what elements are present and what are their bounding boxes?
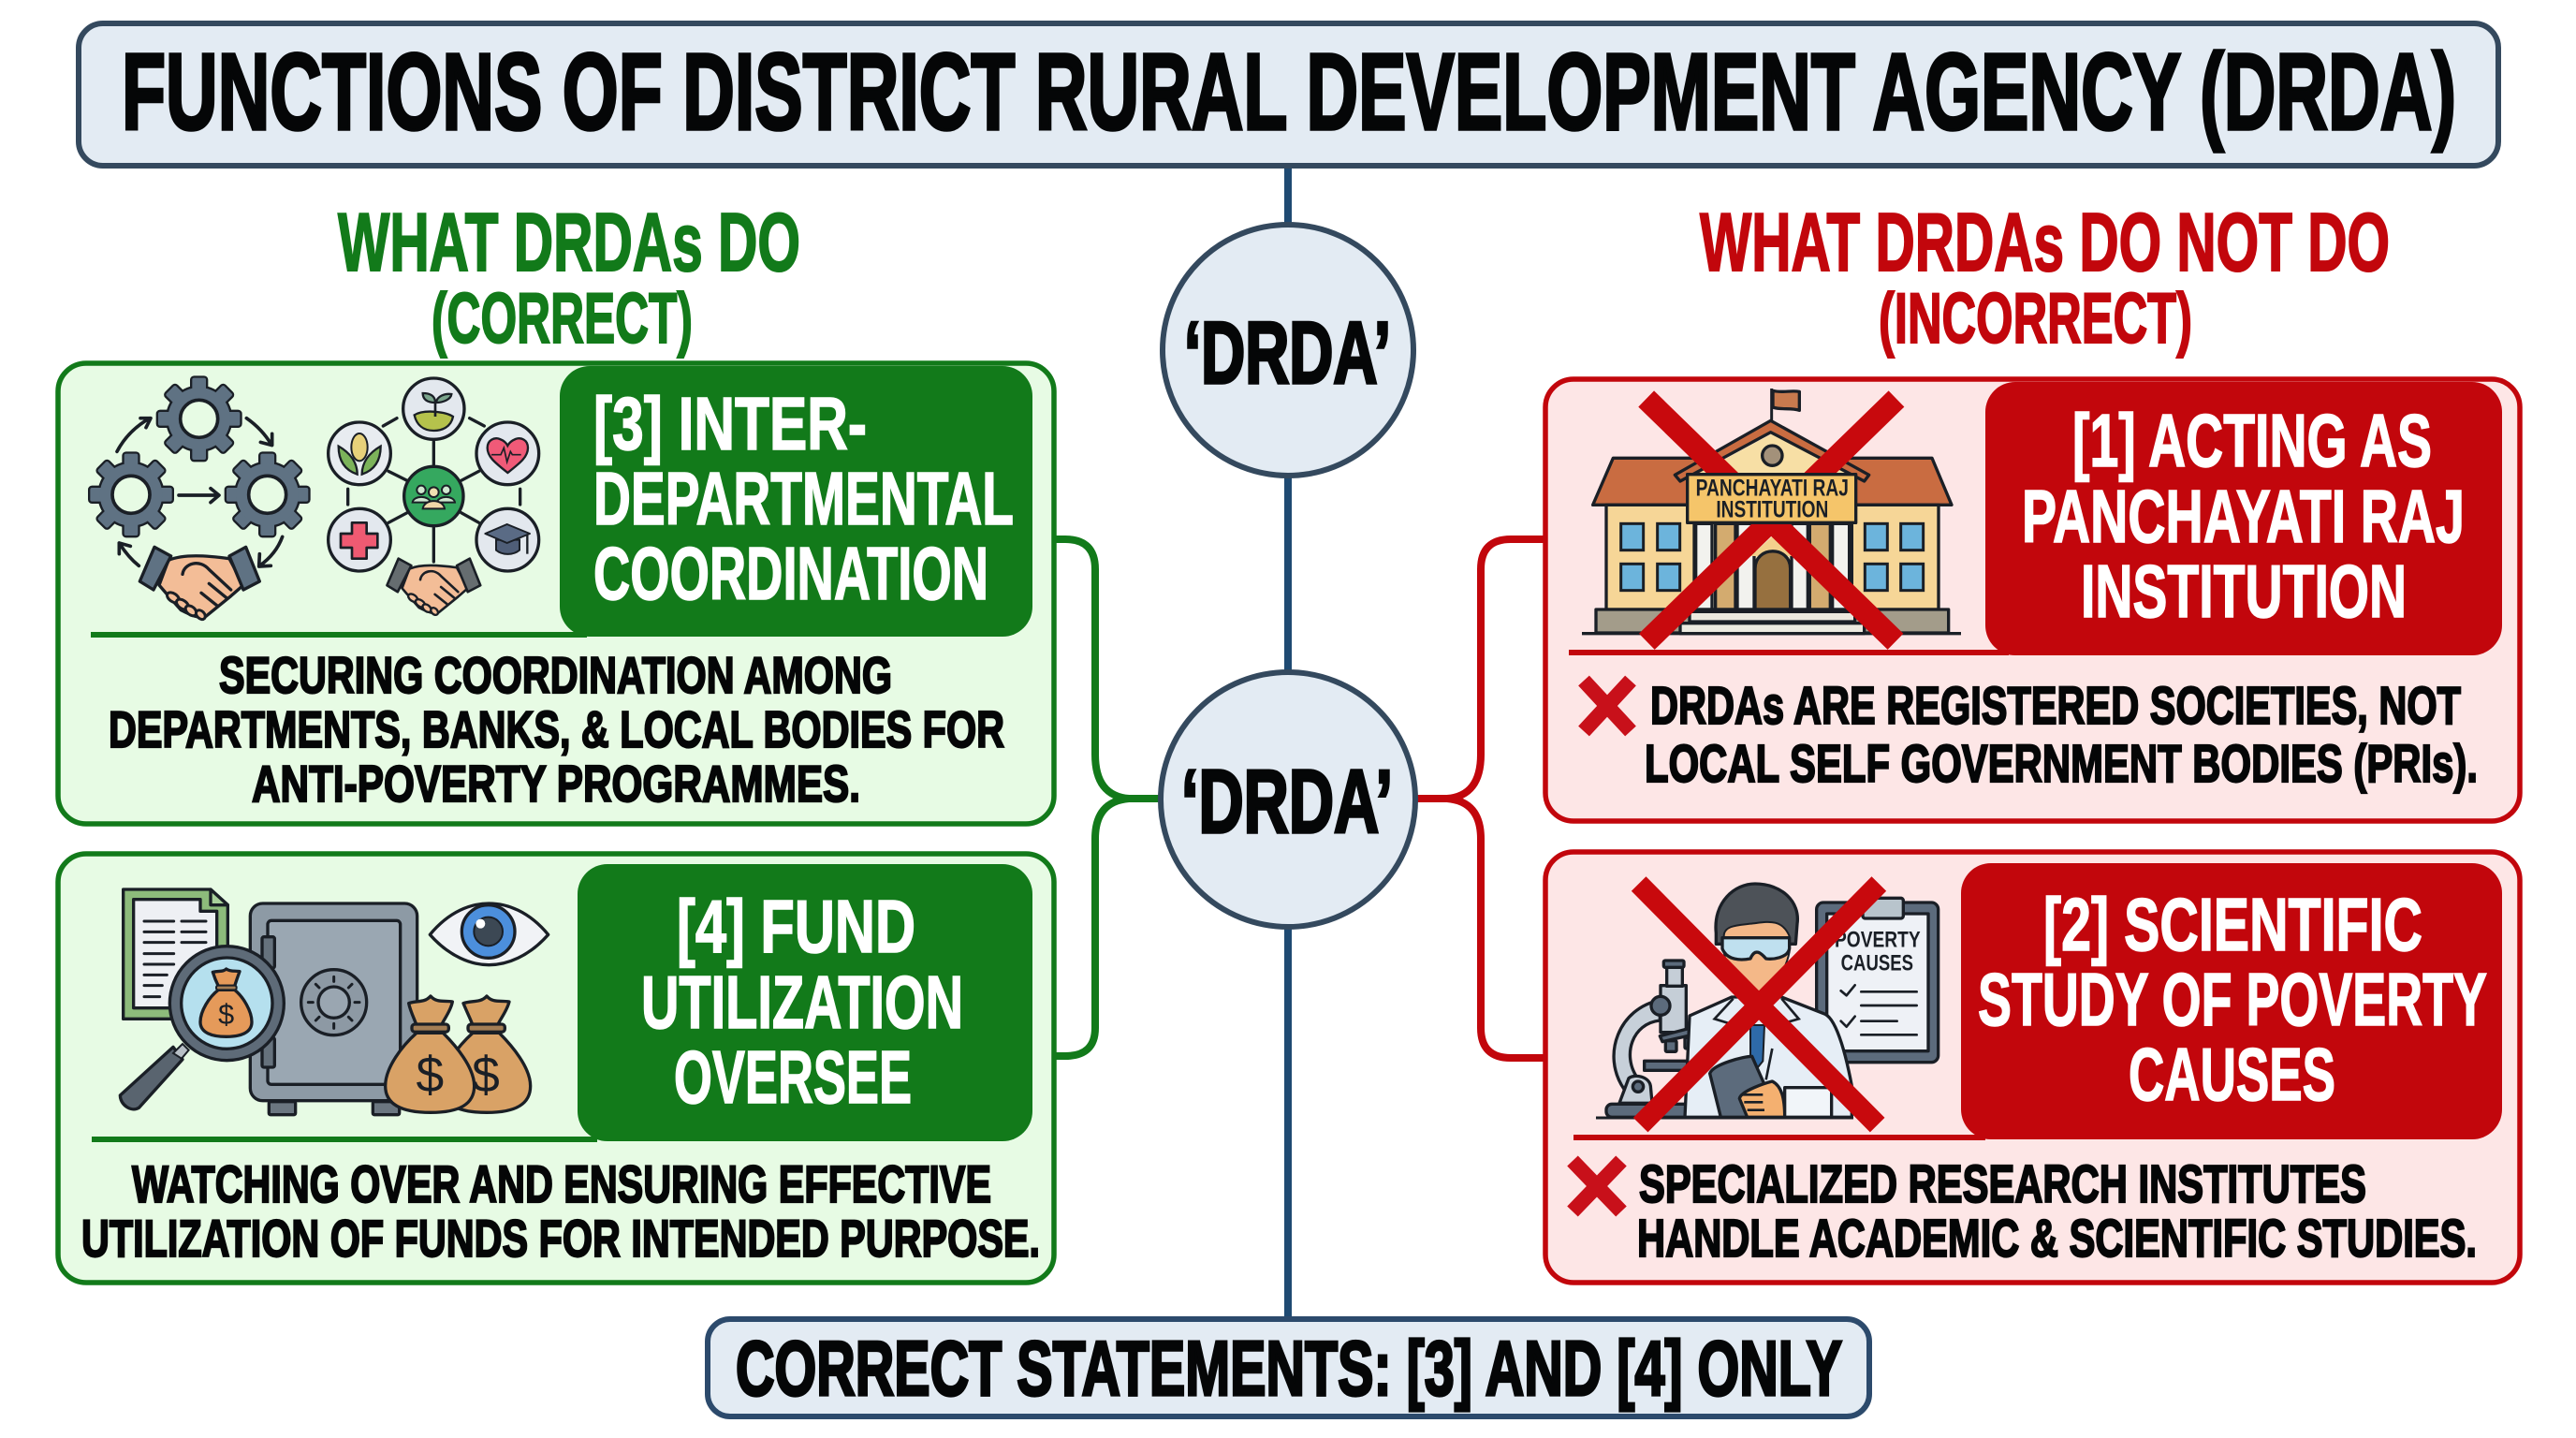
- icon: document, magnifier, safe, eye, money bags: $: [472, 1049, 500, 1104]
- icon: crossed-out scientist with microscope and clipboard: POVERTY: [1835, 928, 1921, 953]
- label box: [578, 864, 1032, 1141]
- description text: ANTI-POVERTY PROGRAMMES.: [252, 755, 860, 813]
- label text: INSTITUTION: [2081, 550, 2407, 633]
- icon: document, magnifier, safe, eye, money bags: $: [416, 1049, 444, 1104]
- description text: WATCHING OVER AND ENSURING EFFECTIVE: [132, 1154, 991, 1213]
- label box: [560, 366, 1032, 637]
- icon: crossed-out scientist with microscope and clipboard: [1596, 884, 1939, 1125]
- description text: SECURING COORDINATION AMONG: [219, 646, 892, 704]
- top DRDA circle: [1163, 225, 1413, 476]
- description text: UTILIZATION OF FUNDS FOR INTENDED PURPOSE.: [81, 1209, 1040, 1268]
- panel: inter-departmental coordination: [58, 363, 1054, 824]
- icon: crossed-out Panchayati Raj building: INSTITUTION: [1716, 497, 1828, 523]
- top DRDA circle: ‘DRDA’: [1184, 303, 1391, 402]
- label text: [2022, 399, 2465, 633]
- panel: scientific study of poverty causes: [1545, 852, 2520, 1283]
- icon: document, magnifier, safe, eye, money bags: [120, 889, 549, 1115]
- bottom answer banner: CORRECT STATEMENTS: [3] AND [4] ONLY: [736, 1325, 1842, 1412]
- label text: [593, 382, 1014, 615]
- icon: crossed-out Panchayati Raj building: PANCHAYATI RAJ: [1696, 475, 1849, 501]
- label text: DEPARTMENTAL: [593, 457, 1014, 540]
- label text: UTILIZATION: [641, 961, 963, 1044]
- label text: OVERSEE: [674, 1035, 912, 1119]
- centre DRDA circle: [1161, 672, 1415, 927]
- divider line: [1573, 1135, 1985, 1140]
- divider line: [91, 632, 587, 638]
- divider line: [1569, 650, 2009, 655]
- description text: [81, 1154, 1040, 1268]
- heading: what DRDAs do not do: (INCORRECT): [1879, 279, 2192, 359]
- label text: CAUSES: [2129, 1033, 2335, 1116]
- description text: [1637, 1154, 2477, 1269]
- red connector to incorrect panels: [1417, 539, 1546, 1058]
- divider line: [92, 1137, 597, 1142]
- label text: [641, 885, 963, 1119]
- label text: [2] SCIENTIFIC: [2043, 883, 2422, 966]
- icon: document, magnifier, safe, eye, money bags: $: [218, 999, 234, 1031]
- icon: crossed-out scientist with microscope and clipboard: CAUSES: [1841, 951, 1913, 976]
- heading: what DRDAs do: (CORRECT): [432, 279, 693, 359]
- label box: [1985, 382, 2502, 655]
- description text: [1645, 676, 2478, 794]
- label text: [1978, 883, 2487, 1116]
- centre DRDA circle: ‘DRDA’: [1181, 752, 1393, 852]
- label box: [1961, 863, 2502, 1139]
- heading: what DRDAs do: WHAT DRDAs DO: [338, 196, 800, 288]
- label text: COORDINATION: [593, 532, 988, 615]
- icon: gears cycle and handshake: [90, 378, 308, 621]
- green connector to correct panels: [1052, 539, 1161, 1056]
- description text: DEPARTMENTS, BANKS, & LOCAL BODIES FOR: [109, 700, 1004, 758]
- bottom answer banner: [708, 1319, 1869, 1416]
- icon: network of departments: [329, 378, 539, 616]
- icon: small red cross: [1573, 1161, 1621, 1211]
- description text: [109, 646, 1004, 813]
- panel: fund utilization oversee: [58, 854, 1054, 1283]
- label text: [3] INTER-: [593, 382, 867, 465]
- central vertical connector: [1284, 165, 1292, 1318]
- icon: crossed-out Panchayati Raj building: [1582, 389, 1961, 641]
- panel: acting as Panchayati Raj institution: [1545, 379, 2520, 821]
- heading: what DRDAs do: [338, 196, 800, 359]
- icon: small red cross: [1584, 681, 1631, 731]
- heading: what DRDAs do not do: [1700, 196, 2390, 359]
- label text: [1] ACTING AS: [2072, 399, 2432, 482]
- label text: [4] FUND: [677, 885, 915, 968]
